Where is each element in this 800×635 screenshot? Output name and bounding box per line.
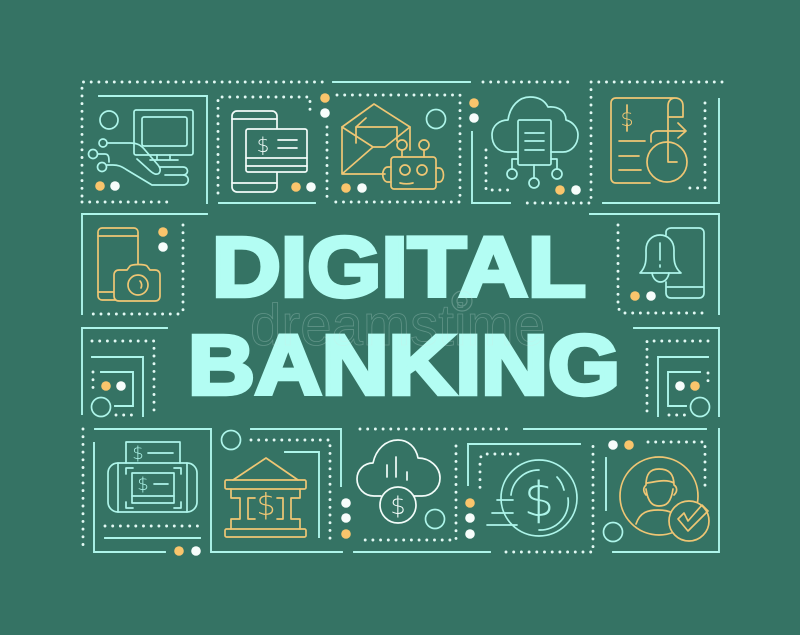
icon: document with clock <box>611 98 687 183</box>
panel: right middle frames <box>590 214 719 416</box>
title: BANKING <box>188 318 620 412</box>
panel: top row frames <box>82 82 722 203</box>
icon: mobile cheque deposit <box>108 442 197 512</box>
watermark: dreamstime <box>250 293 545 358</box>
dots: lower left markers <box>101 381 126 391</box>
dots: icon 1 markers <box>95 181 120 191</box>
dots: profile markers <box>608 440 634 450</box>
circle: lower right <box>690 398 710 416</box>
panel: left middle frames <box>82 214 207 416</box>
dots: cloud markers <box>555 185 581 195</box>
icon: bank building <box>225 458 306 537</box>
icon: mobile cheque deposit: $ <box>132 443 144 464</box>
icon: document with clock: $ <box>620 107 634 131</box>
dots: lower right markers <box>675 381 700 391</box>
icon: cloud with document <box>492 97 578 188</box>
icon: hand touching computer monitor <box>88 110 193 185</box>
circle: lower left <box>92 398 110 416</box>
icon: bank building: $ <box>256 488 276 523</box>
title <box>188 220 620 412</box>
dots: coin column markers <box>465 498 475 539</box>
dots: column markers 2 <box>469 98 479 123</box>
dots: bell markers <box>630 291 656 301</box>
dots: column markers <box>320 93 330 118</box>
icon: moving dollar coin: $ <box>524 472 554 528</box>
circle: cloud panel <box>426 510 444 528</box>
icon: moving dollar coin <box>487 460 577 536</box>
icon: mobile cheque deposit: $ <box>137 474 149 495</box>
title: DIGITAL <box>212 220 586 314</box>
circle: bank panel <box>222 430 240 450</box>
circle: profile panel <box>604 522 622 542</box>
panel: bottom row frames <box>83 429 719 552</box>
icon: phone with bank card: $ <box>257 133 269 157</box>
icon: verified user profile <box>620 457 709 541</box>
dots: bank markers <box>341 498 351 539</box>
dots: envelope markers <box>341 183 367 193</box>
icon: bell with phone <box>640 228 704 298</box>
icon: envelope with robot <box>342 104 444 189</box>
icon: cloud with falling dollar <box>357 440 440 523</box>
icon: phone with camera <box>98 228 160 301</box>
dots: cheque markers <box>174 546 201 556</box>
icon: phone with bank card <box>232 111 307 192</box>
icon: cloud with falling dollar: $ <box>390 492 406 520</box>
dots: camera markers <box>158 227 168 252</box>
circle: envelope panel <box>426 110 446 128</box>
dots: icon 2 markers <box>291 182 316 192</box>
